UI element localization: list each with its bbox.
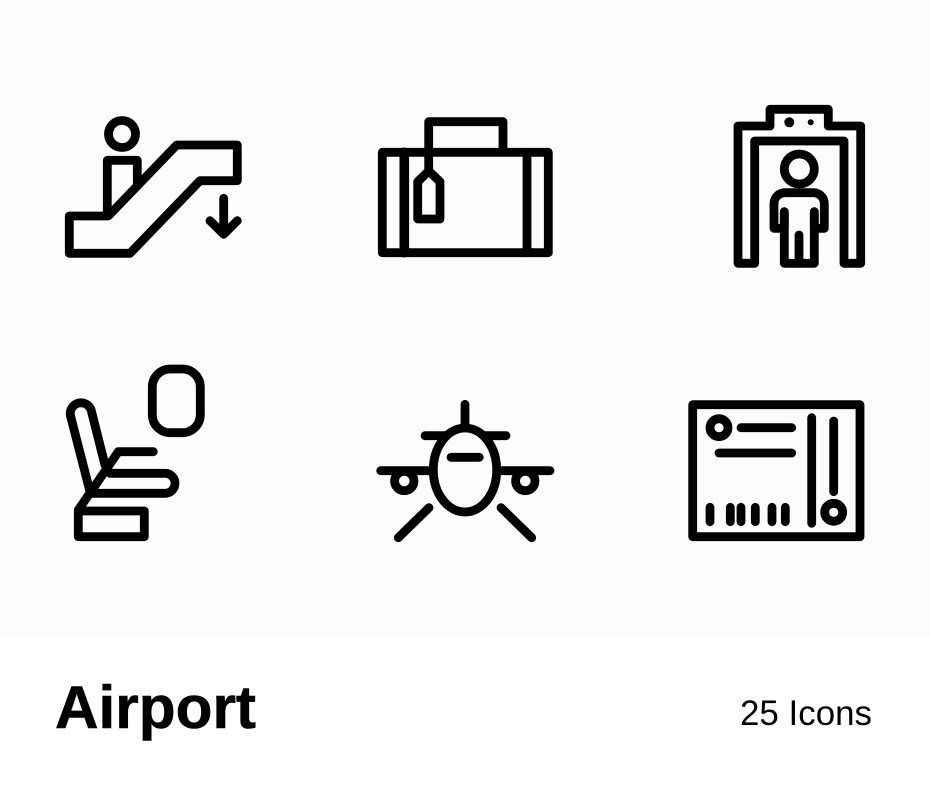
- icon: airplane front view: [381, 404, 550, 538]
- icon: suitcase with tag: [382, 122, 548, 253]
- title: Airport: [55, 674, 256, 741]
- icon count label: 25 Icons: [740, 694, 872, 733]
- panel: footer background: [0, 634, 930, 787]
- icon: airplane seat and window: [70, 369, 200, 537]
- icon: escalator going down: [69, 120, 237, 253]
- icon: boarding pass: [693, 405, 860, 537]
- icon: security scanner gate: [738, 109, 861, 263]
